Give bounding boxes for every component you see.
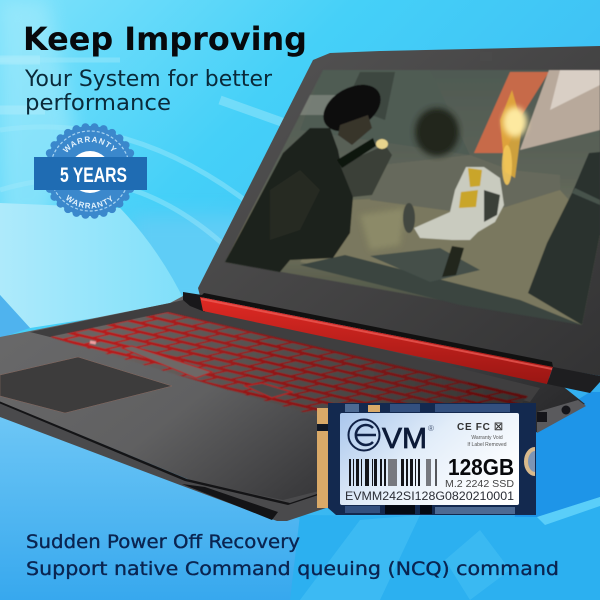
warranty void note: Warranty Void <box>471 435 503 441</box>
serial number: EVMM242SI128G0820210001 <box>345 489 514 503</box>
red hinge bar <box>183 292 600 393</box>
gold contacts <box>317 408 335 508</box>
barcode <box>349 459 437 486</box>
SSD module <box>317 403 536 515</box>
vent <box>182 484 278 520</box>
label removed note: If Label Removed <box>467 442 507 448</box>
EVM logo: ® <box>428 424 434 433</box>
warranty badge: WARRANTY <box>66 194 112 209</box>
laptop <box>0 46 600 521</box>
enemy soldier <box>403 167 504 277</box>
subheading: Your System for better <box>24 67 273 92</box>
space bar <box>122 346 212 378</box>
dark crates <box>528 152 600 325</box>
front edge lip <box>0 403 335 521</box>
warranty badge: 5 YEARS <box>60 164 127 187</box>
feature line 2: Support native Command queuing (NCQ) command <box>26 558 559 580</box>
mounting notch <box>526 449 535 474</box>
EVM logo <box>348 420 434 455</box>
keyboard <box>50 312 528 425</box>
circuit board <box>328 403 536 515</box>
chips on board <box>345 404 515 514</box>
laptop screen <box>225 70 600 325</box>
side ports <box>537 400 586 433</box>
form factor: M.2 2242 SSD <box>445 479 514 490</box>
feature line 1: Sudden Power Off Recovery <box>26 531 300 553</box>
webcam <box>480 52 492 61</box>
heading: Keep Improving: Keep Improving <box>23 20 307 58</box>
EVM logo: VM <box>382 423 427 455</box>
dark splatter <box>415 108 459 156</box>
man with gun <box>225 75 392 272</box>
warranty badge: WARRANTY <box>62 136 117 152</box>
back band of the deck <box>30 300 540 402</box>
capacity: 128GB <box>448 454 514 480</box>
SSD label <box>340 413 519 505</box>
warranty badge <box>34 123 147 219</box>
certification marks: CE FC ☒ <box>457 422 503 433</box>
flame column <box>474 72 549 153</box>
laptop base deck <box>0 296 585 520</box>
laptop lid <box>198 46 600 376</box>
touchpad <box>0 357 172 413</box>
subheading second line: performance <box>25 91 171 116</box>
